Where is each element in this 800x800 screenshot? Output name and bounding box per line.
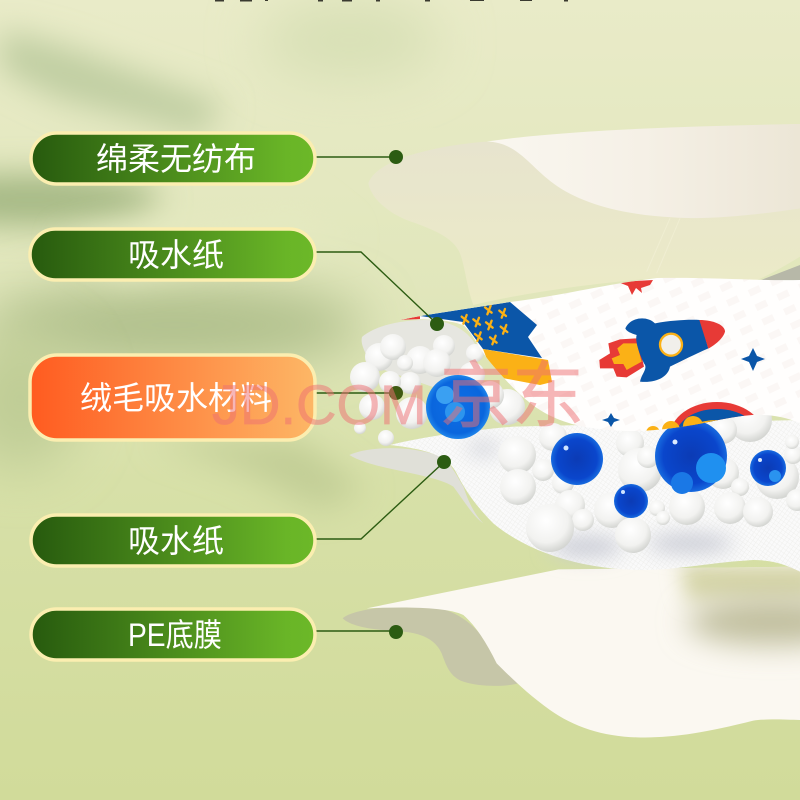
connector dot bbox=[437, 455, 451, 469]
layer: non-woven top sheet bbox=[368, 124, 800, 305]
pill bbox=[31, 515, 315, 566]
watermark: JD.COM 京东 bbox=[212, 357, 584, 437]
film underside flap bbox=[343, 606, 518, 686]
upper paper inner flap bbox=[362, 320, 478, 400]
bead small bbox=[614, 484, 648, 518]
pill bbox=[31, 133, 315, 184]
cropped heading remnant bbox=[215, 0, 568, 2]
rainbow bbox=[671, 402, 754, 428]
connector line bbox=[316, 462, 444, 539]
printed sheet base bbox=[400, 278, 800, 431]
red sliver bbox=[400, 316, 420, 320]
rainbow clouds bbox=[646, 416, 702, 431]
paper left flap bbox=[349, 448, 483, 523]
label: 绒毛吸水材料 bbox=[30, 355, 403, 440]
blue paint block bbox=[420, 302, 542, 358]
label: 绵柔无纺布 bbox=[31, 133, 403, 184]
layer: lower absorbent paper bbox=[349, 420, 800, 572]
yellow brush stroke bbox=[483, 349, 552, 385]
watermark: JD.COM 京东: JD.COM bbox=[212, 373, 427, 436]
absorbent beads: blue spheres bbox=[426, 375, 786, 518]
connector dot bbox=[389, 625, 403, 639]
absorbent fluff: white spheres bbox=[350, 334, 800, 553]
pill bbox=[30, 229, 315, 280]
label: 吸水纸 lower bbox=[31, 455, 451, 566]
pill text: 吸水纸 bbox=[128, 523, 224, 559]
bead large left bbox=[426, 375, 490, 439]
connector dot bbox=[389, 386, 403, 400]
pill bbox=[31, 609, 315, 660]
label: 吸水纸 upper bbox=[30, 229, 444, 331]
printed absorbent paper with rocket bbox=[400, 278, 800, 431]
connector line bbox=[316, 630, 396, 632]
bead large right bbox=[655, 420, 727, 494]
watermark: JD.COM 京东: 京东 bbox=[440, 357, 584, 437]
rocket bbox=[599, 318, 725, 382]
pill text: 吸水纸 bbox=[128, 237, 224, 273]
pill text: 绵柔无纺布 bbox=[96, 141, 256, 177]
label: PE底膜 bbox=[31, 609, 403, 660]
pill text: 绒毛吸水材料 bbox=[80, 380, 272, 416]
bead right bbox=[750, 450, 786, 486]
connector line bbox=[316, 392, 396, 394]
sheet underside bbox=[368, 142, 800, 305]
crease lines bbox=[647, 218, 680, 273]
film face bbox=[367, 567, 800, 737]
paper shadows under spheres bbox=[467, 442, 733, 557]
yellow crosses bbox=[462, 306, 507, 344]
film shadows bbox=[680, 563, 800, 645]
layer: PE bottom film bbox=[343, 563, 800, 737]
connector dot bbox=[389, 150, 403, 164]
quilted paper face bbox=[390, 420, 800, 572]
connector line bbox=[316, 252, 437, 324]
pill text: PE底膜 bbox=[128, 617, 222, 653]
bead bbox=[551, 433, 603, 485]
blue sparkles bbox=[741, 348, 765, 371]
red star fragment bbox=[618, 280, 653, 295]
pill bbox=[30, 355, 315, 440]
connector dot bbox=[430, 317, 444, 331]
connector line bbox=[316, 156, 396, 158]
grey shadow corner bbox=[757, 265, 800, 282]
sheet face bbox=[487, 124, 800, 218]
